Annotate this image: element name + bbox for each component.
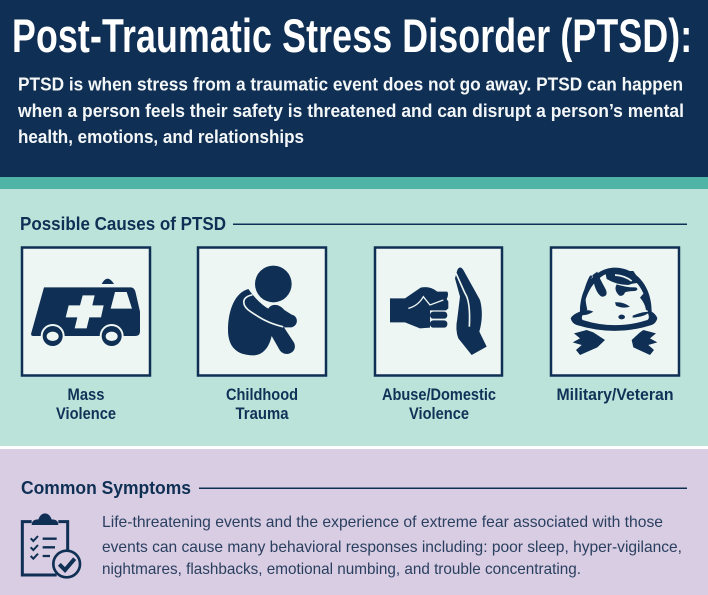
symptoms text: nightmares, flashbacks, emotional numbing, and trouble concentrating. xyxy=(102,561,581,578)
heading: common symptoms: Common Symptoms xyxy=(21,477,191,498)
label: abuse domestic violence: Violence xyxy=(409,405,469,423)
intro text: health, emotions, and relationships xyxy=(18,127,304,147)
symptoms text: events can cause many behavioral responses including: poor sleep, hyper-vigilance, xyxy=(102,539,682,556)
panel: header xyxy=(0,0,708,189)
icon: clipboard with check xyxy=(22,513,80,577)
cause: military or veteran xyxy=(551,248,679,404)
intro text: when a person feels their safety is threatened and can disrupt a person’s mental xyxy=(17,101,684,121)
label: mass violence xyxy=(56,386,116,423)
icon: fist and raised hand xyxy=(390,267,487,355)
label: abuse domestic violence xyxy=(382,386,496,423)
label: mass violence: Mass xyxy=(68,386,104,404)
intro text: PTSD is when stress from a traumatic event does not go away. PTSD can happen xyxy=(18,74,683,94)
cause: mass violence xyxy=(22,248,150,423)
cause: childhood trauma xyxy=(198,248,326,423)
cause: abuse or domestic violence xyxy=(375,248,502,423)
label: military veteran: Military/Veteran xyxy=(556,386,674,404)
panel: common symptoms xyxy=(0,449,708,595)
intro text xyxy=(17,74,684,147)
label: childhood trauma xyxy=(226,386,298,423)
icon: ambulance xyxy=(31,279,140,348)
icon: camouflage helmet xyxy=(571,268,657,355)
heading: possible causes: Possible Causes of PTSD xyxy=(20,213,226,234)
label: childhood trauma: Childhood xyxy=(226,386,298,404)
symptoms text: Life-threatening events and the experience of extreme fear associated with those xyxy=(102,514,663,531)
label: abuse domestic violence: Abuse/Domestic xyxy=(382,386,496,404)
icon: sitting child xyxy=(228,266,297,355)
title: Post-Traumatic Stress Disorder (PTSD): xyxy=(12,9,692,62)
symptoms text xyxy=(102,514,682,578)
label: childhood trauma: Trauma xyxy=(236,405,289,423)
panel: possible causes xyxy=(0,189,708,446)
label: mass violence: Violence xyxy=(56,405,116,423)
